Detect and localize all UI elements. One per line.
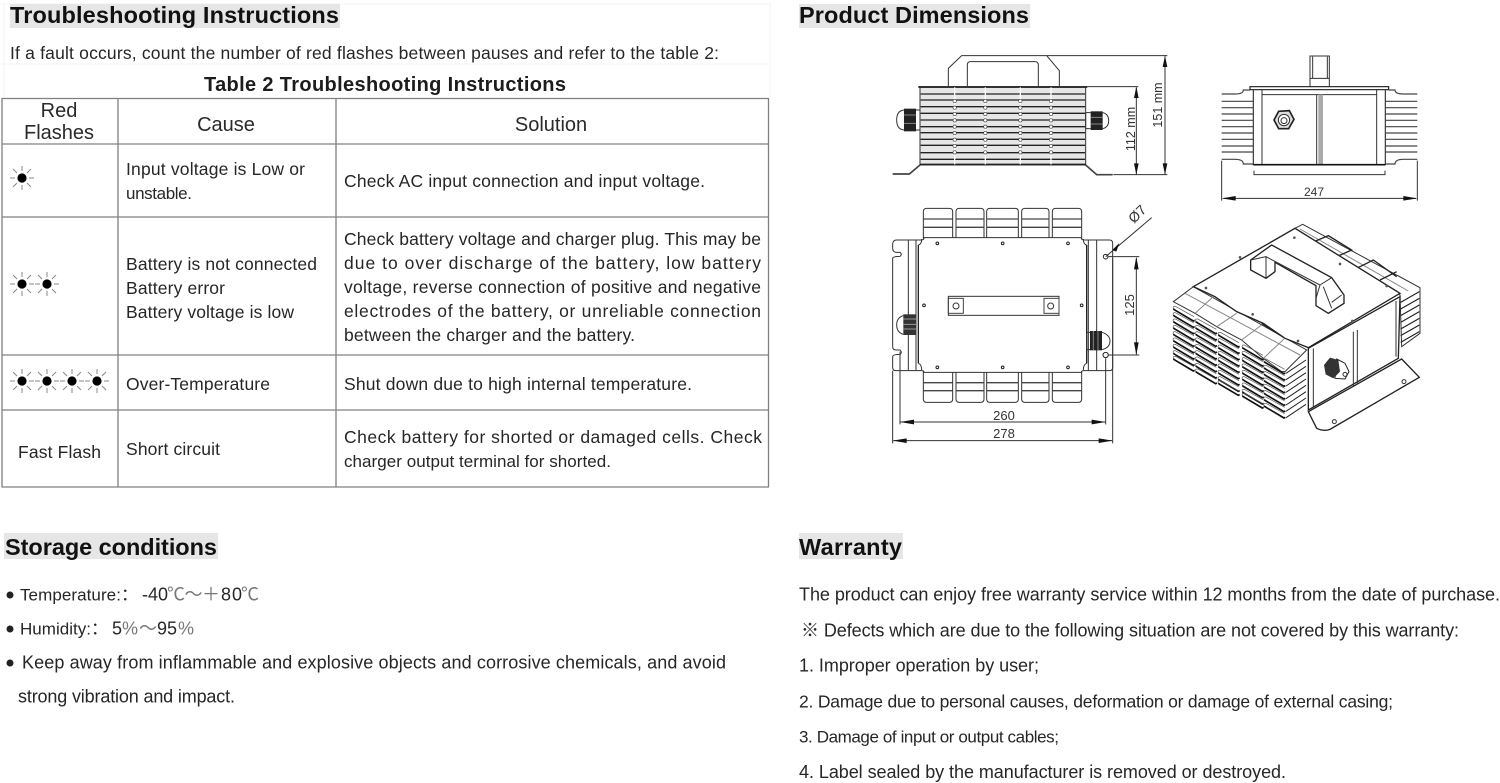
solution text (344, 427, 762, 471)
solution text: between the charger and the battery. (344, 325, 635, 345)
drawing: isometric view (1173, 224, 1420, 430)
solution text: Check AC input connection and input voltage. (344, 171, 705, 191)
icon: two flashes (10, 272, 59, 296)
stack 1 (1173, 306, 1195, 371)
fins top and bottom (923, 208, 1082, 402)
dimension label: 112 mm: 112 mm (1124, 107, 1138, 151)
heading: Product Dimensions: Product Dimensions (799, 2, 1029, 28)
mounting feet (893, 165, 1113, 175)
cable glands (897, 109, 1109, 131)
warranty text: 3. Damage of input or output cables; (799, 728, 1059, 746)
row: input voltage (10, 159, 705, 203)
row: over-temperature (10, 369, 692, 394)
icon: one flash (10, 166, 34, 190)
dimension lines (1047, 56, 1167, 175)
dimension label: 151 mm: 151 mm (1151, 82, 1165, 128)
heading: Storage conditions: Storage conditions (5, 534, 217, 560)
top plate (1193, 228, 1400, 348)
cause text (126, 159, 305, 203)
mounting plate (893, 238, 1113, 372)
handle tab (1310, 56, 1329, 87)
handle (948, 296, 1059, 315)
header row: Solution (515, 114, 587, 136)
item: humidity: 95 (157, 618, 177, 638)
solution text: Check battery for shorted or damaged cells. Check (344, 427, 762, 447)
flat top tabs (1173, 287, 1307, 372)
header row (24, 100, 587, 144)
intro text: If a fault occurs, count the number of red flashes between pauses and refer to the table 2: (10, 43, 719, 63)
cable gland (1324, 358, 1349, 379)
warranty text: ※ Defects which are due to the following situation are not covered by this warranty: (801, 620, 1459, 640)
dimension label: diameter 7: Ø7 (1125, 201, 1149, 226)
row: battery (10, 229, 761, 345)
stack 4 (1242, 345, 1264, 408)
cause text: Over-Temperature (126, 374, 270, 394)
far fins (1295, 224, 1420, 347)
cause text: Short circuit (126, 439, 220, 459)
body panel (1250, 87, 1389, 175)
item: temperature: Temperature:： (20, 586, 138, 604)
cause text: unstable. (126, 184, 192, 203)
fast flash label: Fast Flash (18, 442, 101, 462)
stack 2 (1195, 319, 1217, 384)
heading: Warranty: Warranty (799, 534, 902, 560)
item: temperature: ℃～＋ (167, 584, 220, 604)
item: temperature: -40 (142, 584, 168, 604)
troubleshooting table (2, 98, 768, 487)
table grid (2, 98, 768, 487)
solution text: Check battery voltage and charger plug. This may be (344, 229, 761, 249)
item: humidity: 5 (112, 618, 122, 638)
drawing: top view (893, 201, 1152, 443)
warranty text (799, 584, 1500, 782)
heading: Troubleshooting Instructions: Troubleshooting Instructions (10, 2, 339, 28)
stack 3 (1218, 332, 1240, 395)
drawing: side view (1222, 56, 1417, 201)
item: temperature: 80 (221, 584, 242, 604)
item: keep away: Keep away from inflammable and explosive objects and corrosive chemicals, and avoid (22, 652, 726, 672)
cable glands (897, 314, 1110, 350)
item: temperature (6, 584, 259, 604)
item: humidity (6, 618, 194, 638)
item: humidity: Humidity:： (20, 620, 108, 638)
left fin stacks (1173, 287, 1307, 418)
header row: Red (41, 100, 77, 122)
warranty text: The product can enjoy free warranty service within 12 months from the date of purchase. (799, 584, 1500, 604)
plate holes (1205, 236, 1388, 342)
stack 5 (1264, 359, 1285, 418)
solution text: due to over discharge of the battery, low battery (344, 253, 761, 273)
item: humidity: % (178, 618, 194, 638)
dimension label: 260: 260 (993, 408, 1015, 423)
holes (923, 242, 1108, 369)
header row: Cause (197, 114, 255, 136)
item: humidity: %～ (122, 618, 157, 638)
drawing: front view (893, 56, 1167, 175)
table title: Table 2 Troubleshooting Instructions (204, 74, 566, 96)
cause text: Battery error (126, 278, 225, 298)
cause text: Battery voltage is low (126, 302, 294, 322)
cable gland (1274, 111, 1294, 129)
cause text (126, 254, 317, 322)
warranty text: 2. Damage due to personal causes, deformation or damage of external casing; (799, 692, 1393, 712)
cause text: Battery is not connected (126, 254, 317, 274)
dimension lines (893, 218, 1152, 443)
solution text: electrodes of the battery, or unreliable connection (344, 301, 761, 321)
cause text: Input voltage is Low or (126, 159, 305, 179)
end panel (1308, 297, 1400, 410)
handle (948, 56, 1059, 87)
row: short circuit (18, 427, 762, 471)
solution text: voltage, reverse connection of positive and negative (344, 277, 761, 297)
icon: four flashes (10, 369, 109, 393)
solution text (344, 229, 761, 345)
item: keep away (6, 652, 726, 706)
warranty text: 1. Improper operation by user; (799, 656, 1039, 676)
dimension lines (1222, 161, 1417, 201)
header row: Flashes (24, 122, 94, 144)
storage conditions list (6, 584, 726, 706)
fins (1222, 90, 1417, 164)
dimension label: 278: 278 (993, 426, 1015, 441)
charger body with fins (918, 87, 1087, 165)
warranty text: 4. Label sealed by the manufacturer is removed or destroyed. (799, 762, 1286, 782)
dimension label: 125: 125 (1122, 294, 1137, 316)
mounting foot (1308, 359, 1419, 430)
item: temperature: ℃ (241, 584, 259, 604)
item: keep away: strong vibration and impact. (18, 686, 235, 706)
dimension label: 247: 247 (1304, 185, 1324, 199)
handle (1251, 245, 1344, 313)
solution text: Shut down due to high internal temperature. (344, 374, 692, 394)
solution text: charger output terminal for shorted. (344, 452, 611, 471)
